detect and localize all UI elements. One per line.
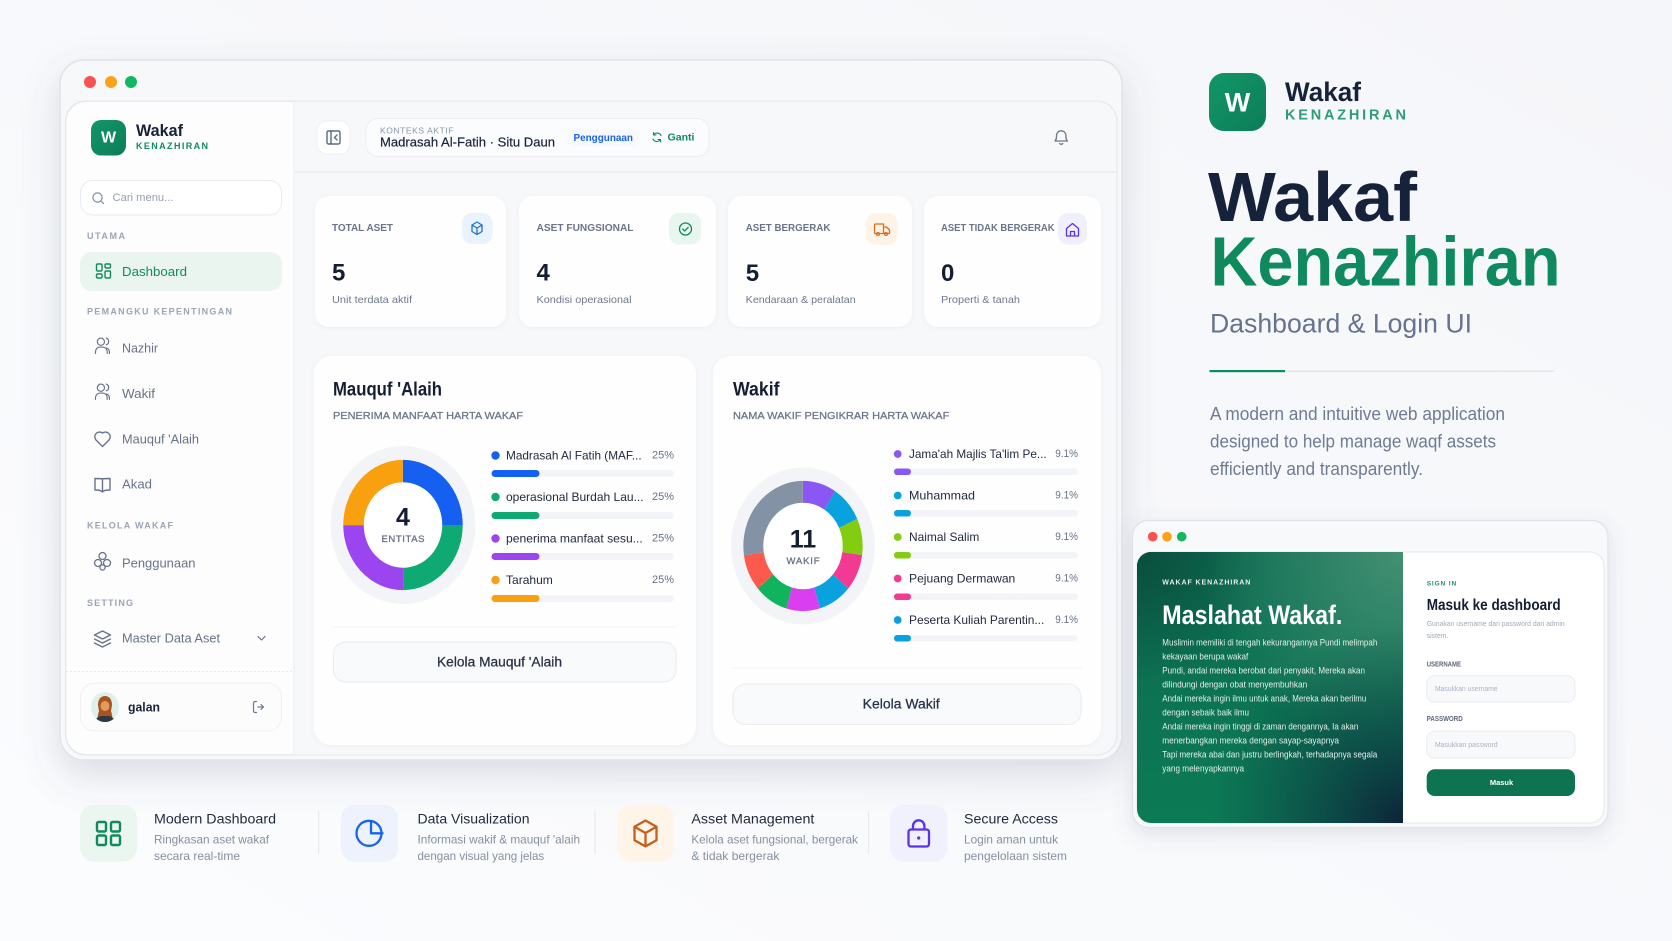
hero body text: Muslimin memiliki di tengah kekurangannya Pundi melimpah: [1162, 638, 1377, 648]
stat card: aset tidak bergerak: ASET TIDAK BERGERAK: [941, 223, 1055, 234]
hero body text: Tapi mereka abai dan justru berlingkah, terhadapnya segala: [1162, 749, 1377, 759]
context pill: Ganti: [668, 132, 695, 144]
legend: jamaah majlis talim: [894, 447, 1078, 475]
username field: Masukkan username: [1435, 686, 1498, 693]
hero body text: [1162, 638, 1377, 773]
legend: muhammad: 9.1%: [1055, 490, 1078, 502]
legend: muhammad: Muhammad: [909, 488, 975, 502]
legend: naimal salim: 9.1%: [1055, 531, 1078, 543]
stat card: aset bergerak: ASET BERGERAK: [746, 223, 831, 234]
submit button: [1427, 769, 1575, 796]
window controls: [84, 76, 137, 88]
stat card: aset bergerak: Kendaraan & peralatan: [746, 294, 856, 306]
legend: penerima manfaat: 25%: [652, 532, 674, 544]
legend: naimal salim: Naimal Salim: [909, 530, 979, 544]
password field: Masukkan password: [1435, 742, 1498, 749]
context pill: KONTEKS AKTIF: [380, 126, 454, 136]
stat card: total aset: TOTAL ASET: [332, 223, 393, 234]
accent divider: [1210, 370, 1554, 372]
panel heading: Wakif: [733, 380, 780, 400]
dashboard window: [60, 60, 1122, 760]
legend: tarahum: Tarahum: [506, 573, 553, 587]
hero body text: Andai mereka ingin ilmu untuk anak, Mereka akan berilmu: [1162, 694, 1366, 704]
legend: jamaah majlis talim: Jama'ah Majlis Ta'lim Pe...: [909, 447, 1047, 461]
app frame: [66, 101, 1117, 755]
button: kelola mauquf alaih: Kelola Mauquf 'Alaih: [437, 654, 562, 670]
avatar: [91, 692, 119, 722]
brand logo: Wakaf: [1285, 77, 1362, 107]
main title: [1208, 158, 1560, 300]
feature: modern dashboard: Ringkasan aset wakaf: [154, 832, 270, 846]
search box: Cari menu...: [112, 192, 174, 204]
menu item: akad: Akad: [122, 476, 152, 492]
hero body text: kekayaan berupa wakaf: [1162, 652, 1249, 662]
sign in form: [1427, 580, 1575, 796]
hero heading: Maslahat Wakaf.: [1162, 600, 1342, 630]
sign in form: sistem.: [1427, 631, 1448, 640]
menu item: dashboard active: [80, 252, 282, 291]
main title: Wakaf: [1208, 158, 1418, 236]
menu item: wakif: [96, 384, 155, 401]
user card: [80, 683, 282, 731]
subtitle: Dashboard & Login UI: [1210, 308, 1472, 338]
username field: USERNAME: [1427, 662, 1461, 668]
donut chart: wakif: WAKIF: [786, 556, 820, 567]
sign in form: Gunakan username dan password dari admin: [1427, 619, 1565, 628]
panel subtitle: PENERIMA MANFAAT HARTA WAKAF: [333, 410, 523, 422]
legend: naimal salim: [894, 530, 1078, 558]
panel heading: Mauquf 'Alaih: [333, 380, 442, 400]
stat card: aset fungsional: 4: [536, 260, 550, 286]
description: [1210, 404, 1505, 479]
panel: wakif: [713, 356, 1101, 745]
legend: peserta kuliah: Peserta Kuliah Parentin...: [909, 613, 1044, 627]
description: designed to help manage waqf assets: [1210, 431, 1496, 451]
collapse button: [317, 121, 350, 154]
main title: Kenazhiran: [1210, 222, 1560, 300]
feature: asset management: Kelola aset fungsional, bergerak: [691, 832, 859, 846]
legend: madrasah al fatih: 25%: [652, 450, 674, 462]
notification bell: [1055, 131, 1067, 144]
stat card: aset bergerak: 5: [746, 260, 759, 287]
feature: data visualization: Informasi wakif & mauquf 'alaih: [418, 832, 580, 846]
section label: pemangku kepentingan: PEMANGKU KEPENTINGAN: [87, 306, 232, 316]
feature: data visualization: dengan visual yang jelas: [418, 849, 544, 863]
stat card: aset tidak bergerak: Properti & tanah: [941, 294, 1020, 306]
menu item: penggunaan: Penggunaan: [122, 556, 196, 570]
sign in form: Masuk ke dashboard: [1427, 597, 1561, 614]
hero panel: WAKAF KENAZHIRAN: [1162, 580, 1250, 586]
feature: asset management: Asset Management: [691, 810, 815, 826]
sign in form: SIGN IN: [1427, 580, 1456, 588]
login window: [1132, 520, 1608, 828]
brand logo: [1209, 73, 1406, 131]
feature: modern dashboard: [80, 805, 276, 863]
context pill: Penggunaan: [574, 132, 633, 144]
stat card: aset fungsional: ASET FUNGSIONAL: [536, 223, 634, 234]
stat card: aset bergerak: [728, 196, 912, 327]
section label: kelola wakaf: KELOLA WAKAF: [87, 520, 174, 530]
description: efficiently and transparently.: [1210, 459, 1423, 479]
submit button: Masuk: [1490, 778, 1514, 787]
stat card: aset fungsional: [519, 196, 716, 327]
legend: operasional burdah: operasional Burdah Lau...: [506, 490, 644, 504]
hero body text: Pundi, andai mereka berobat dari penyakit, Mereka akan: [1162, 666, 1365, 676]
feature: modern dashboard: secara real-time: [154, 849, 240, 863]
hero body text: dilindungi dengan obat menyembuhkan: [1162, 680, 1307, 690]
username field: [1427, 662, 1575, 702]
sidebar logo: W: [101, 130, 117, 146]
window controls: [1148, 532, 1186, 542]
legend: operasional burdah: [491, 490, 674, 519]
stat card: aset tidak bergerak: [924, 196, 1101, 327]
legend: pejuang dermawan: 9.1%: [1055, 572, 1078, 584]
button: kelola wakif: [733, 684, 1081, 724]
legend: madrasah al fatih: [491, 448, 674, 477]
legend: muhammad: [894, 488, 1078, 516]
menu item: akad: [95, 476, 152, 492]
password field: PASSWORD: [1427, 716, 1463, 723]
top bar: [294, 118, 1117, 172]
donut chart: wakif: [731, 468, 875, 624]
sidebar logo: Wakaf: [136, 122, 183, 140]
legend: peserta kuliah: [894, 613, 1078, 642]
hero body text: menerbangkan mereka dengan sayap-sayapnya: [1162, 735, 1339, 745]
feature: secure access: [890, 805, 1067, 863]
button: kelola wakif: Kelola Wakif: [863, 696, 940, 712]
legend: pejuang dermawan: Pejuang Dermawan: [909, 572, 1015, 586]
sidebar: [66, 102, 294, 754]
menu item: dashboard active: Dashboard: [122, 264, 187, 279]
brand logo: W: [1225, 88, 1251, 118]
feature: secure access: pengelolaan sistem: [964, 849, 1067, 863]
donut chart: entitas: [330, 446, 476, 604]
context pill: [366, 118, 709, 156]
sidebar logo: KENAZHIRAN: [136, 141, 208, 151]
brand logo: KENAZHIRAN: [1285, 108, 1406, 124]
legend: madrasah al fatih: Madrasah Al Fatih (MAF...: [506, 448, 642, 462]
description: A modern and intuitive web application: [1210, 404, 1505, 424]
feature: asset management: & tidak bergerak: [691, 849, 780, 863]
menu item: mauquf alaih: Mauquf 'Alaih: [122, 432, 199, 446]
feature: secure access: Secure Access: [964, 810, 1058, 826]
menu item: master data aset: Master Data Aset: [122, 630, 220, 646]
menu item: nazhir: [96, 338, 159, 356]
menu item: nazhir: Nazhir: [122, 340, 159, 356]
stat card: total aset: [315, 196, 506, 327]
legend: tarahum: [491, 573, 674, 602]
hero body text: dengan sebaik baik ilmu: [1162, 708, 1249, 718]
section label: setting: SETTING: [87, 598, 133, 608]
feature: data visualization: Data Visualization: [418, 810, 530, 826]
feature: modern dashboard: Modern Dashboard: [154, 810, 276, 826]
menu item: wakif: Wakif: [122, 386, 155, 401]
section label: utama: UTAMA: [87, 231, 126, 241]
stat card: aset tidak bergerak: 0: [941, 260, 954, 287]
stat card: total aset: 5: [332, 260, 345, 286]
menu item: master data aset: [94, 630, 265, 647]
menu item: penggunaan: [94, 552, 196, 570]
button: kelola mauquf alaih: [334, 642, 676, 682]
panel: mauquf alaih: [314, 356, 696, 745]
legend: operasional burdah: 25%: [652, 491, 674, 503]
search box: [80, 180, 282, 215]
context pill: Madrasah Al-Fatih · Situ Daun: [380, 134, 555, 150]
legend: penerima manfaat: penerima manfaat sesu...: [506, 532, 643, 546]
legend: pejuang dermawan: [894, 572, 1078, 600]
hero panel: [1137, 552, 1403, 823]
donut chart: entitas: ENTITAS: [382, 534, 424, 545]
feature: data visualization: [341, 805, 580, 863]
hero body text: yang melenyapkannya: [1162, 763, 1244, 773]
legend: jamaah majlis talim: 9.1%: [1055, 448, 1078, 460]
feature: secure access: Login aman untuk: [964, 832, 1059, 846]
hero body text: Andai mereka ingin tinggi di zaman dengannya, Ia akan: [1162, 721, 1358, 731]
sidebar logo: [91, 120, 208, 156]
legend: peserta kuliah: 9.1%: [1055, 614, 1078, 626]
stat card: total aset: Unit terdata aktif: [332, 294, 412, 306]
donut chart: wakif: 11: [790, 526, 816, 554]
password field: [1427, 716, 1575, 758]
feature: asset management: [617, 805, 859, 863]
user card: galan: [128, 700, 160, 714]
legend: penerima manfaat: [491, 532, 674, 560]
stat card: aset fungsional: Kondisi operasional: [536, 294, 632, 306]
donut chart: entitas: 4: [396, 504, 410, 532]
legend: tarahum: 25%: [652, 574, 674, 586]
panel subtitle: NAMA WAKIF PENGIKRAR HARTA WAKAF: [733, 410, 949, 422]
